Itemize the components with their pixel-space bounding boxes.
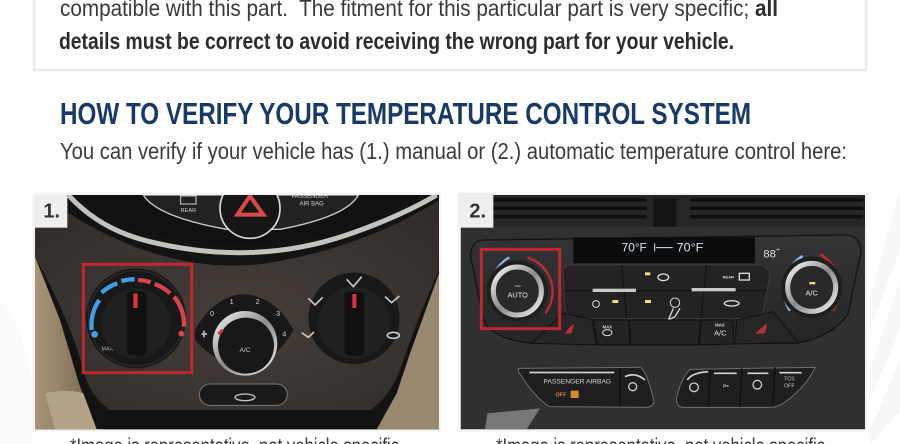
lower button row: A/C xyxy=(714,329,727,338)
center bezel xyxy=(195,294,294,358)
auto dial: AUTO xyxy=(508,290,528,299)
ac dial: A/C xyxy=(806,288,818,297)
airbag switch panel: PASSENGER AIRBAG xyxy=(544,378,611,385)
panel: manual control photo xyxy=(33,178,441,432)
fan speed dial: A/C xyxy=(239,347,251,354)
fan plus icon: 88 xyxy=(763,248,776,260)
fan speed dial: 2 xyxy=(256,297,260,306)
number label 1 xyxy=(35,195,67,228)
fan speed dial: 4 xyxy=(282,330,286,339)
panel: manual control photo: AIR BAG xyxy=(300,201,324,207)
number label 2: 2. xyxy=(469,200,486,222)
ac dial xyxy=(781,255,842,318)
display: 70°F xyxy=(677,240,703,254)
traction switch panel: OFF xyxy=(784,383,795,389)
rear defrost and airbag switches xyxy=(143,195,358,229)
lower button row: MAX xyxy=(603,324,612,329)
brown dash fascia xyxy=(35,200,439,410)
icon: hazard button xyxy=(219,195,281,240)
fan speed dial: 0 xyxy=(210,309,214,318)
fan plus icon: + xyxy=(776,246,780,253)
lower button row xyxy=(532,312,798,345)
temperature dial: MAX xyxy=(102,347,114,353)
display: 70°F xyxy=(622,240,647,254)
lower button row: MAX xyxy=(715,323,725,328)
fan speed dial: 1 xyxy=(230,297,234,306)
air vents xyxy=(461,195,865,227)
notice text xyxy=(59,0,778,54)
recirculation switch xyxy=(199,384,287,405)
panel: manual control photo: PASSENGER xyxy=(292,194,329,200)
number label 2 xyxy=(458,193,493,228)
airbag switch panel xyxy=(518,367,654,407)
notice text: details must be correct to avoid receiving the wrong part for your vehicle. xyxy=(59,28,734,54)
traction switch panel: TCS xyxy=(784,377,795,383)
beige side trim xyxy=(35,257,97,429)
airflow dial xyxy=(302,273,400,364)
button block: REAR xyxy=(723,275,734,280)
fan speed dial: 3 xyxy=(276,309,280,318)
airbag switch panel: OFF xyxy=(555,393,567,399)
number label 1: 1. xyxy=(43,200,60,222)
display xyxy=(573,237,755,263)
traction switch panel: P≡ xyxy=(723,383,729,388)
silver arch xyxy=(68,195,437,253)
button block xyxy=(563,264,770,320)
auto dial xyxy=(487,257,553,322)
fan speed dial xyxy=(202,297,286,376)
traction switch panel xyxy=(677,367,815,407)
climate fascia xyxy=(471,235,861,343)
red highlight box xyxy=(83,264,192,373)
temperature dial xyxy=(86,268,186,368)
panel: manual control photo: REAR xyxy=(180,208,196,214)
panel: notice card xyxy=(34,0,866,70)
panel: automatic control photo xyxy=(458,193,867,432)
red highlight box xyxy=(481,249,560,329)
